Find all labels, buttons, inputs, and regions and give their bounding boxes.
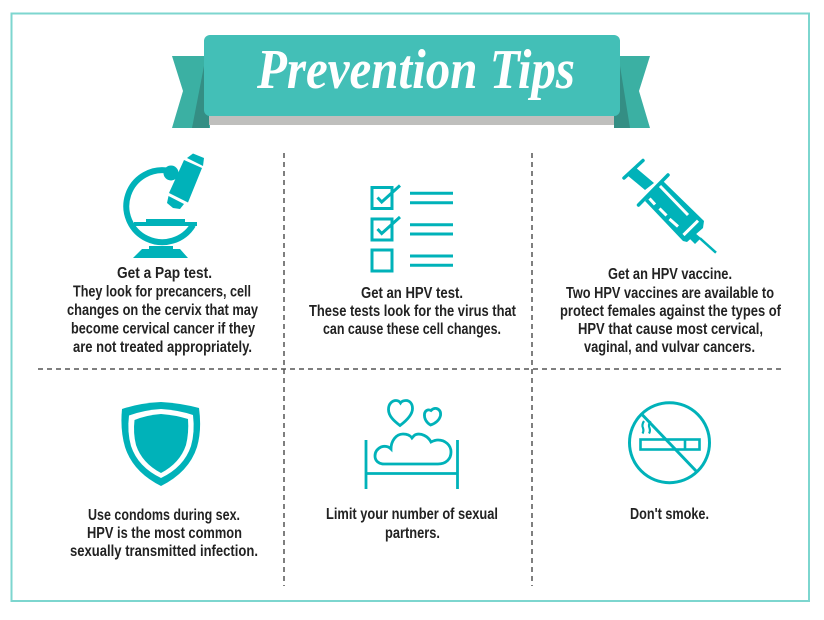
- title banner: [172, 35, 650, 128]
- text: use condoms: Use condoms during sex.: [88, 507, 240, 524]
- heading: Prevention Tips: [256, 39, 575, 101]
- text: limit partners: partners.: [385, 525, 440, 542]
- text: don't smoke: Don't smoke.: [630, 506, 709, 523]
- text: use condoms: sexually transmitted infection.: [70, 543, 258, 560]
- text: get a Pap test: Get a Pap test.: [117, 265, 212, 282]
- text: use condoms: [70, 507, 258, 560]
- icon: checklist: [372, 186, 453, 271]
- text: limit partners: [326, 506, 498, 542]
- text: get an HPV vaccine: vaginal, and vulvar cancers.: [584, 339, 755, 356]
- icon: syringe: [624, 160, 716, 253]
- text: get an HPV vaccine: Two HPV vaccines are available to: [566, 285, 774, 302]
- text: get a Pap test: changes on the cervix that may: [67, 302, 258, 319]
- text: get an HPV test: can cause these cell changes.: [323, 321, 501, 338]
- text: get an HPV vaccine: [560, 266, 782, 356]
- icon: shield: [121, 402, 200, 486]
- text: get a Pap test: become cervical cancer if they: [71, 320, 255, 338]
- icon: microscope: [126, 154, 204, 258]
- text: get an HPV vaccine: HPV that cause most cervical,: [578, 321, 763, 338]
- text: limit partners: Limit your number of sexual: [326, 506, 498, 523]
- text: get a Pap test: are not treated appropriately.: [73, 339, 252, 356]
- text: get an HPV test: Get an HPV test.: [361, 285, 463, 302]
- icon: no smoking: [630, 403, 710, 483]
- icon: bed with hearts: [366, 400, 458, 489]
- text: use condoms: HPV is the most common: [87, 525, 242, 542]
- text: get an HPV test: [309, 285, 517, 338]
- text: get an HPV test: These tests look for the virus that: [309, 303, 517, 320]
- text: get a Pap test: [67, 265, 258, 356]
- text: get a Pap test: They look for precancers, cell: [73, 284, 251, 300]
- text: get an HPV vaccine: Get an HPV vaccine.: [608, 266, 732, 283]
